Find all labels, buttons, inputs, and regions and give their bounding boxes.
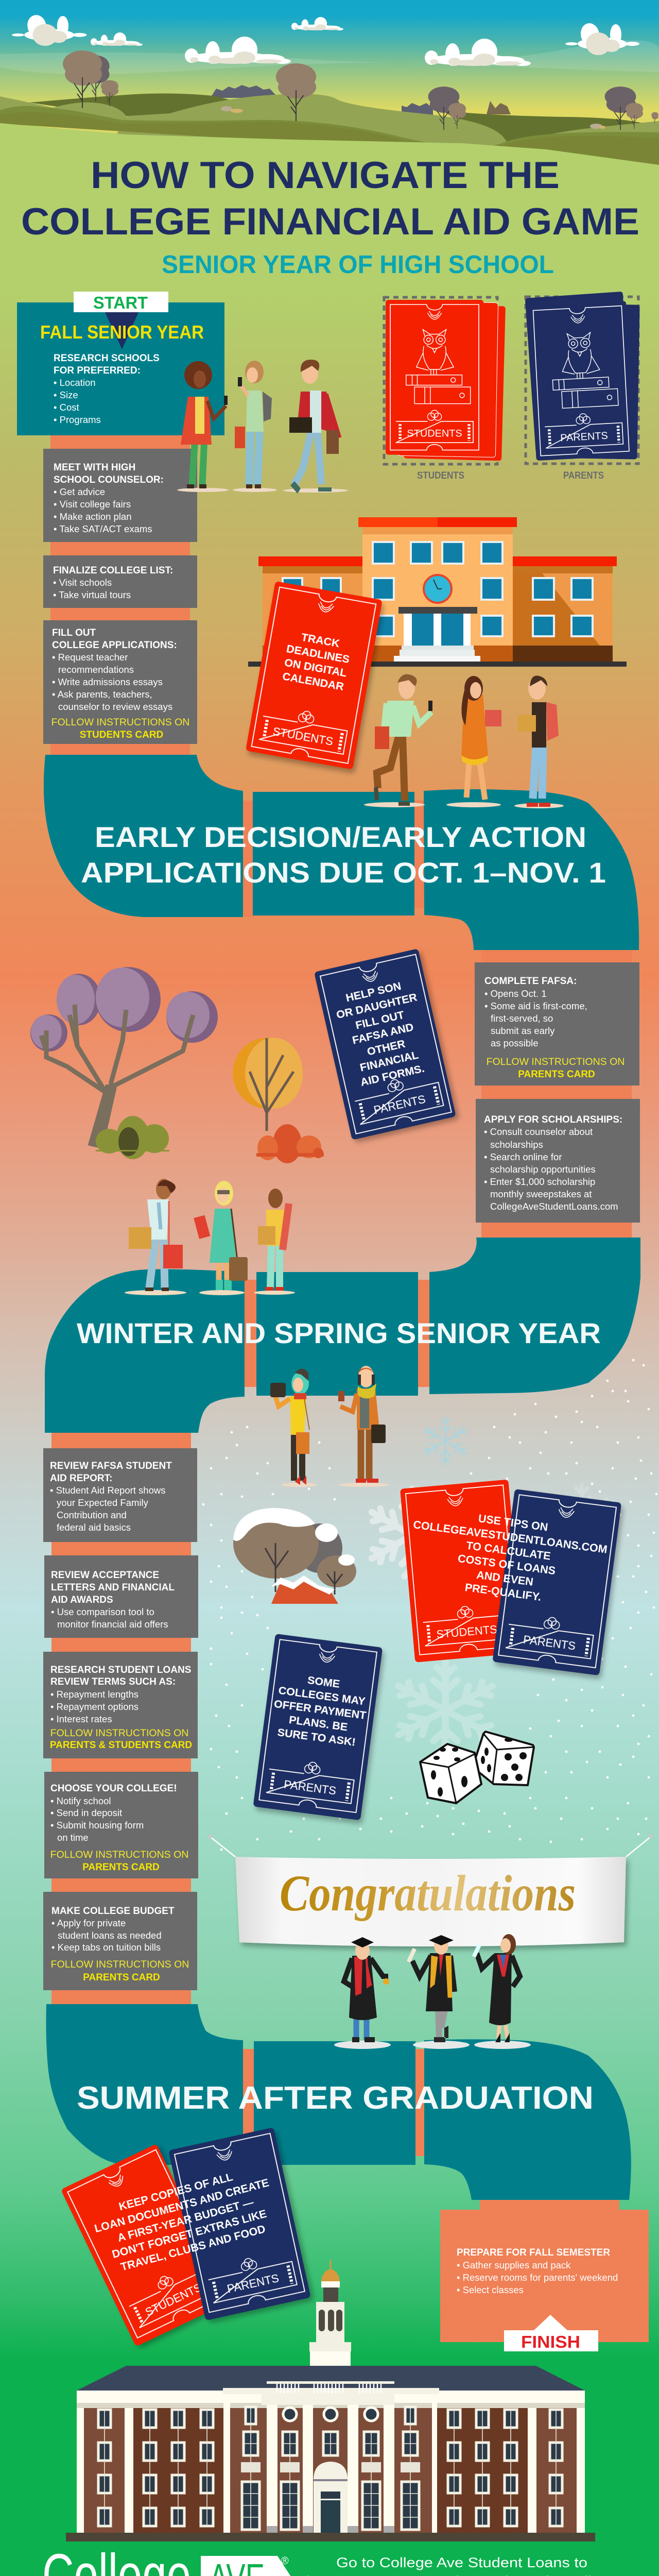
- research list: RESEARCH SCHOOLS: [54, 353, 160, 364]
- title: [21, 155, 639, 243]
- keep copies text: DON'T FORGET EXTRAS LIKE: [111, 2208, 268, 2261]
- card: payment plans: COLLEGES MAY: [278, 1684, 366, 1707]
- card deck: students: [384, 297, 506, 481]
- panel: complete fafsa: PARENTS CARD: [518, 1069, 595, 1080]
- panel: research loans: RESEARCH STUDENT LOANS: [50, 1665, 191, 1675]
- panel: meet counselor: • Visit college fairs: [54, 499, 131, 510]
- person 6: [514, 675, 564, 808]
- panel: college budget: MAKE COLLEGE BUDGET: [51, 1906, 175, 1917]
- start label: START: [93, 293, 148, 312]
- panel: prepare for fall semester: PREPARE FOR FALL SEMESTER: [457, 2247, 610, 2258]
- road 2 heading: WINTER AND SPRING SENIOR YEAR: [77, 1317, 601, 1349]
- card: track deadlines: DEADLINES: [285, 642, 351, 666]
- entrance door: [314, 2462, 348, 2533]
- panel: review fafsa: Contribution and: [57, 1510, 127, 1520]
- panel: meet counselor: MEET WITH HIGH: [54, 462, 135, 473]
- graduates: [334, 1934, 531, 2049]
- card: help son or daughter: OTHER: [366, 1037, 407, 1058]
- tips text: COLLEGEAVESTUDENTLOANS.COM: [412, 1518, 608, 1556]
- panel: apply for scholarships: scholarship opportunities: [490, 1164, 596, 1175]
- snowflakes: [367, 1417, 617, 1759]
- keep copies text: LOAN DOCUMENTS AND CREATE: [93, 2176, 270, 2235]
- field edge: [0, 123, 659, 216]
- start arrow: [105, 312, 138, 349]
- panel: finalize list: [43, 555, 197, 608]
- panel: research loans: REVIEW TERMS SUCH AS:: [50, 1676, 176, 1687]
- panel: apply for scholarships: • Enter $1,000 scholarship: [484, 1176, 595, 1187]
- panel: complete fafsa: as possible: [491, 1038, 539, 1048]
- panel: fall senior year: [17, 292, 224, 435]
- orange path column, fall: [50, 433, 190, 757]
- label: students: STUDENTS: [417, 470, 464, 481]
- card: payment plans: [253, 1634, 383, 1820]
- card: track deadlines: TRACK: [300, 631, 341, 650]
- autumn yellow tree: [233, 1038, 324, 1163]
- panel: college budget: [43, 1892, 197, 1990]
- congratulations text: Congratulations: [280, 1865, 576, 1922]
- panel: applications: COLLEGE APPLICATIONS:: [52, 640, 177, 651]
- panel: meet counselor: • Get advice: [54, 486, 105, 497]
- graduate 3: [472, 1934, 531, 2049]
- panel: college budget: • Keep tabs on tuition bills: [51, 1942, 161, 1953]
- orange path column, winter: [51, 1433, 191, 2005]
- graduate 1: [334, 1937, 391, 2049]
- research list: FOR PREFERRED:: [54, 365, 141, 376]
- panel: apply for scholarships: • Search online for: [484, 1151, 562, 1162]
- tips text: PRE-QUALIFY.: [464, 1581, 542, 1603]
- card deck: parents: [525, 292, 640, 481]
- person 9: [254, 1189, 295, 1295]
- panel: meet counselor: • Make action plan: [54, 511, 131, 522]
- panel: research loans: PARENTS & STUDENTS CARD: [50, 1740, 192, 1751]
- panel: review letters: • Use comparison tool to: [51, 1606, 154, 1617]
- snow bush tree: [233, 1508, 356, 1604]
- panel: meet counselor: [43, 449, 197, 542]
- card: students tips: STUDENTS: [436, 1623, 498, 1641]
- tips text: TO CALCULATE: [465, 1539, 551, 1563]
- panel: apply for scholarships: [476, 1099, 640, 1223]
- panel: choose college: [44, 1772, 198, 1878]
- tips text: COSTS OF LOANS: [457, 1552, 556, 1577]
- road 3: [46, 2004, 631, 2200]
- road 1 heading: EARLY DECISION/EARLY ACTION: [95, 821, 586, 853]
- students people group: [177, 360, 348, 494]
- entrance: [394, 607, 480, 662]
- card: help son or daughter: PARENTS: [372, 1093, 427, 1117]
- panel: college budget: FOLLOW INSTRUCTIONS ON: [51, 1959, 189, 1970]
- clouds: [12, 13, 639, 66]
- panel: college budget: student loans as needed: [58, 1930, 162, 1941]
- panel: prepare for fall semester: • Gather supplies and pack: [457, 2260, 571, 2270]
- plaques: [241, 2462, 420, 2472]
- panel: apply for scholarships: CollegeAveStudentLoans.com: [490, 1201, 618, 1212]
- finish marker: [504, 2315, 598, 2351]
- card: help son or daughter: AID FORMS.: [359, 1062, 426, 1089]
- road 1 heading: APPLICATIONS DUE OCT. 1–NOV. 1: [81, 856, 606, 889]
- panel: choose college: CHOOSE YOUR COLLEGE!: [50, 1783, 177, 1794]
- panel: review letters: monitor financial aid offers: [57, 1619, 168, 1630]
- panel: complete fafsa: first-served, so: [491, 1013, 553, 1024]
- panel: complete fafsa: • Some aid is first-come,: [484, 1001, 587, 1011]
- start label: [74, 292, 168, 312]
- oculus windows: [283, 2408, 378, 2421]
- fall heading: FALL SENIOR YEAR: [40, 321, 204, 343]
- panel: review fafsa: • Student Aid Report shows: [50, 1485, 166, 1496]
- panel: review fafsa: [43, 1448, 197, 1542]
- card: payment plans: PARENTS: [283, 1778, 337, 1798]
- panel: finalize list: FINALIZE COLLEGE LIST:: [53, 565, 173, 576]
- panel: choose college: FOLLOW INSTRUCTIONS ON: [50, 1849, 188, 1860]
- clock: [424, 575, 452, 603]
- panel: complete fafsa: COMPLETE FAFSA:: [484, 976, 577, 987]
- tips text: AND EVEN: [476, 1569, 534, 1588]
- road 2: [45, 1238, 640, 1433]
- road 1 heading: [81, 821, 606, 889]
- keep copies text: [89, 2162, 282, 2277]
- tips text: USE TIPS ON: [478, 1512, 549, 1534]
- panel: meet counselor: • Take SAT/ACT exams: [54, 523, 152, 534]
- card: parents tips: [492, 1489, 621, 1675]
- panel: applications: [43, 620, 197, 744]
- card: help son or daughter: FINANCIAL: [359, 1048, 420, 1074]
- road 1: [44, 755, 639, 950]
- research list: • Cost: [54, 402, 79, 413]
- panel: apply for scholarships: scholarships: [490, 1139, 543, 1150]
- card: payment plans: SURE TO ASK!: [276, 1726, 356, 1749]
- green bush: [96, 1116, 169, 1159]
- person 3: [283, 360, 348, 494]
- person 11: [338, 1366, 389, 1487]
- windows grid: [98, 2407, 562, 2530]
- panel: review letters: LETTERS AND FINANCIAL: [51, 1582, 175, 1593]
- card: payment plans: OFFER PAYMENT: [273, 1698, 367, 1722]
- person 5: [446, 676, 501, 807]
- card: parents keep copies: [168, 2127, 311, 2320]
- person 10: [270, 1368, 317, 1487]
- orange bush: [256, 1124, 324, 1163]
- card: help son or daughter: OR DAUGHTER: [335, 991, 419, 1021]
- card: help son or daughter: FAFSA AND: [351, 1021, 415, 1046]
- snow: [203, 1360, 656, 1850]
- panel: college budget: • Apply for private: [51, 1918, 126, 1928]
- card: track deadlines: [246, 581, 383, 770]
- panel: apply for scholarships: APPLY FOR SCHOLARSHIPS:: [484, 1114, 622, 1125]
- orange strips road 2: [244, 1280, 430, 1387]
- panel: review letters: [44, 1555, 198, 1638]
- label: parents: PARENTS: [563, 470, 604, 481]
- panel: applications: FILL OUT: [52, 628, 96, 638]
- panel: review letters: AID AWARDS: [51, 1595, 113, 1605]
- panel: choose college: • Submit housing form: [50, 1820, 144, 1831]
- panel: review fafsa: federal aid basics: [57, 1522, 131, 1533]
- cupola: [309, 2260, 351, 2366]
- panel: complete fafsa: submit as early: [491, 1025, 555, 1036]
- students people group 2: [364, 674, 564, 808]
- hill trees: [63, 50, 658, 130]
- person 7: [125, 1179, 186, 1295]
- card: payment plans: PLANS. BE: [288, 1714, 349, 1733]
- panel: choose college: • Notify school: [50, 1795, 111, 1806]
- panel: apply for scholarships: monthly sweepstakes at: [490, 1189, 592, 1199]
- card: track deadlines: ON DIGITAL: [284, 656, 348, 680]
- panel: choose college: on time: [57, 1832, 89, 1843]
- panel: research loans: • Interest rates: [50, 1714, 112, 1724]
- card: students keep copies: STUDENTS: [143, 2281, 204, 2319]
- panel: review fafsa: your Expected Family: [57, 1497, 149, 1508]
- panel: research loans: FOLLOW INSTRUCTIONS ON: [50, 1727, 188, 1739]
- research list: • Location: [54, 377, 96, 388]
- card: track deadlines: CALENDAR: [282, 670, 345, 693]
- panel: prepare for fall semester: • Select classes: [457, 2284, 524, 2295]
- panel: complete fafsa: • Opens Oct. 1: [484, 988, 547, 999]
- panel: meet counselor: SCHOOL COUNSELOR:: [54, 474, 164, 485]
- card: help son or daughter: [314, 948, 456, 1140]
- orange strips road 3: [242, 2049, 619, 2212]
- tips text: [405, 1504, 610, 1611]
- panel: applications: recommendations: [58, 664, 134, 675]
- panel: applications: FOLLOW INSTRUCTIONS ON: [51, 717, 189, 728]
- keep copies text: KEEP COPIES OF ALL: [117, 2171, 234, 2213]
- far tree lines: [212, 85, 511, 118]
- panel: applications: • Request teacher: [52, 652, 128, 663]
- college building: [66, 2260, 595, 2541]
- panel: research loans: [43, 1652, 198, 1758]
- road 3 heading: SUMMER AFTER GRADUATION: [77, 2080, 594, 2116]
- keep copies text: TRAVEL, CLUBS AND FOOD: [119, 2223, 267, 2273]
- person 2: [233, 361, 277, 492]
- card deck: students: STUDENTS: [407, 428, 462, 439]
- balustrade: [267, 2381, 394, 2393]
- landscape header: [0, 40, 659, 216]
- keep copies text: A FIRST-YEAR BUDGET —: [116, 2196, 255, 2244]
- research list: • Size: [54, 389, 78, 400]
- panel: college budget: PARENTS CARD: [83, 1972, 160, 1983]
- panel: review fafsa: AID REPORT:: [50, 1473, 112, 1484]
- panel: choose college: • Send in deposit: [50, 1807, 122, 1818]
- panel: research loans: • Repayment lengths: [50, 1689, 138, 1700]
- panel: applications: STUDENTS CARD: [80, 730, 163, 740]
- rocks: [221, 106, 605, 129]
- college ave logo: ®: [281, 2555, 289, 2567]
- card: parents keep copies: PARENTS: [226, 2272, 280, 2295]
- card: payment plans: SOME: [307, 1674, 341, 1690]
- window muntins: [105, 2407, 556, 2530]
- panel: finalize list: • Take virtual tours: [53, 589, 131, 600]
- autumn purple tree: [30, 967, 218, 1159]
- graduate 2: [407, 1935, 470, 2049]
- card: help son or daughter: FILL OUT: [354, 1009, 405, 1031]
- orange strips road 1: [242, 801, 425, 917]
- back hills: [29, 93, 273, 121]
- person 1: [177, 361, 229, 492]
- panel: applications: • Ask parents, teachers,: [52, 689, 152, 700]
- panel: research loans: • Repayment options: [50, 1701, 138, 1712]
- panel: review fafsa: REVIEW FAFSA STUDENT: [50, 1461, 172, 1471]
- school building: [248, 517, 627, 667]
- title: COLLEGE FINANCIAL AID GAME: [21, 201, 639, 243]
- subtitle: SENIOR YEAR OF HIGH SCHOOL: [162, 251, 554, 279]
- card: track deadlines: STUDENTS: [272, 725, 334, 748]
- person 4: [364, 674, 432, 807]
- research list: [54, 353, 160, 425]
- foreground ribbon hill: [0, 106, 659, 165]
- research list: • Programs: [54, 414, 101, 425]
- panel: choose college: PARENTS CARD: [82, 1862, 160, 1873]
- panel: complete fafsa: [475, 962, 639, 1086]
- call to action: Go to College Ave Student Loans to: [336, 2555, 587, 2570]
- call to action: [306, 2555, 623, 2576]
- panel: applications: • Write admissions essays: [52, 676, 163, 687]
- congratulations banner: [208, 1834, 653, 1946]
- finish marker: FINISH: [521, 2332, 580, 2351]
- card: parents tips: PARENTS: [523, 1633, 576, 1653]
- title: HOW TO NAVIGATE THE: [91, 155, 560, 196]
- panel: review letters: REVIEW ACCEPTANCE: [51, 1570, 159, 1581]
- panel: finalize list: • Visit schools: [53, 577, 112, 588]
- card: students tips: [400, 1480, 524, 1663]
- card deck: parents: PARENTS: [560, 430, 608, 444]
- parents people group: [125, 1179, 295, 1295]
- orange path column, fafsa: [481, 950, 632, 1239]
- panel: apply for scholarships: • Consult counselor about: [484, 1126, 593, 1137]
- panel: complete fafsa: FOLLOW INSTRUCTIONS ON: [487, 1056, 625, 1067]
- panel: prepare for fall semester: • Reserve rooms for parents' weekend: [457, 2272, 618, 2283]
- card: students keep copies: [61, 2144, 232, 2347]
- panel: applications: counselor to review essays: [58, 701, 172, 712]
- card: help son or daughter: HELP SON: [344, 980, 402, 1004]
- dice: [420, 1732, 534, 1803]
- person 8: [194, 1181, 248, 1295]
- winter people group: [270, 1366, 389, 1487]
- panel: prepare for fall semester: [440, 2210, 649, 2342]
